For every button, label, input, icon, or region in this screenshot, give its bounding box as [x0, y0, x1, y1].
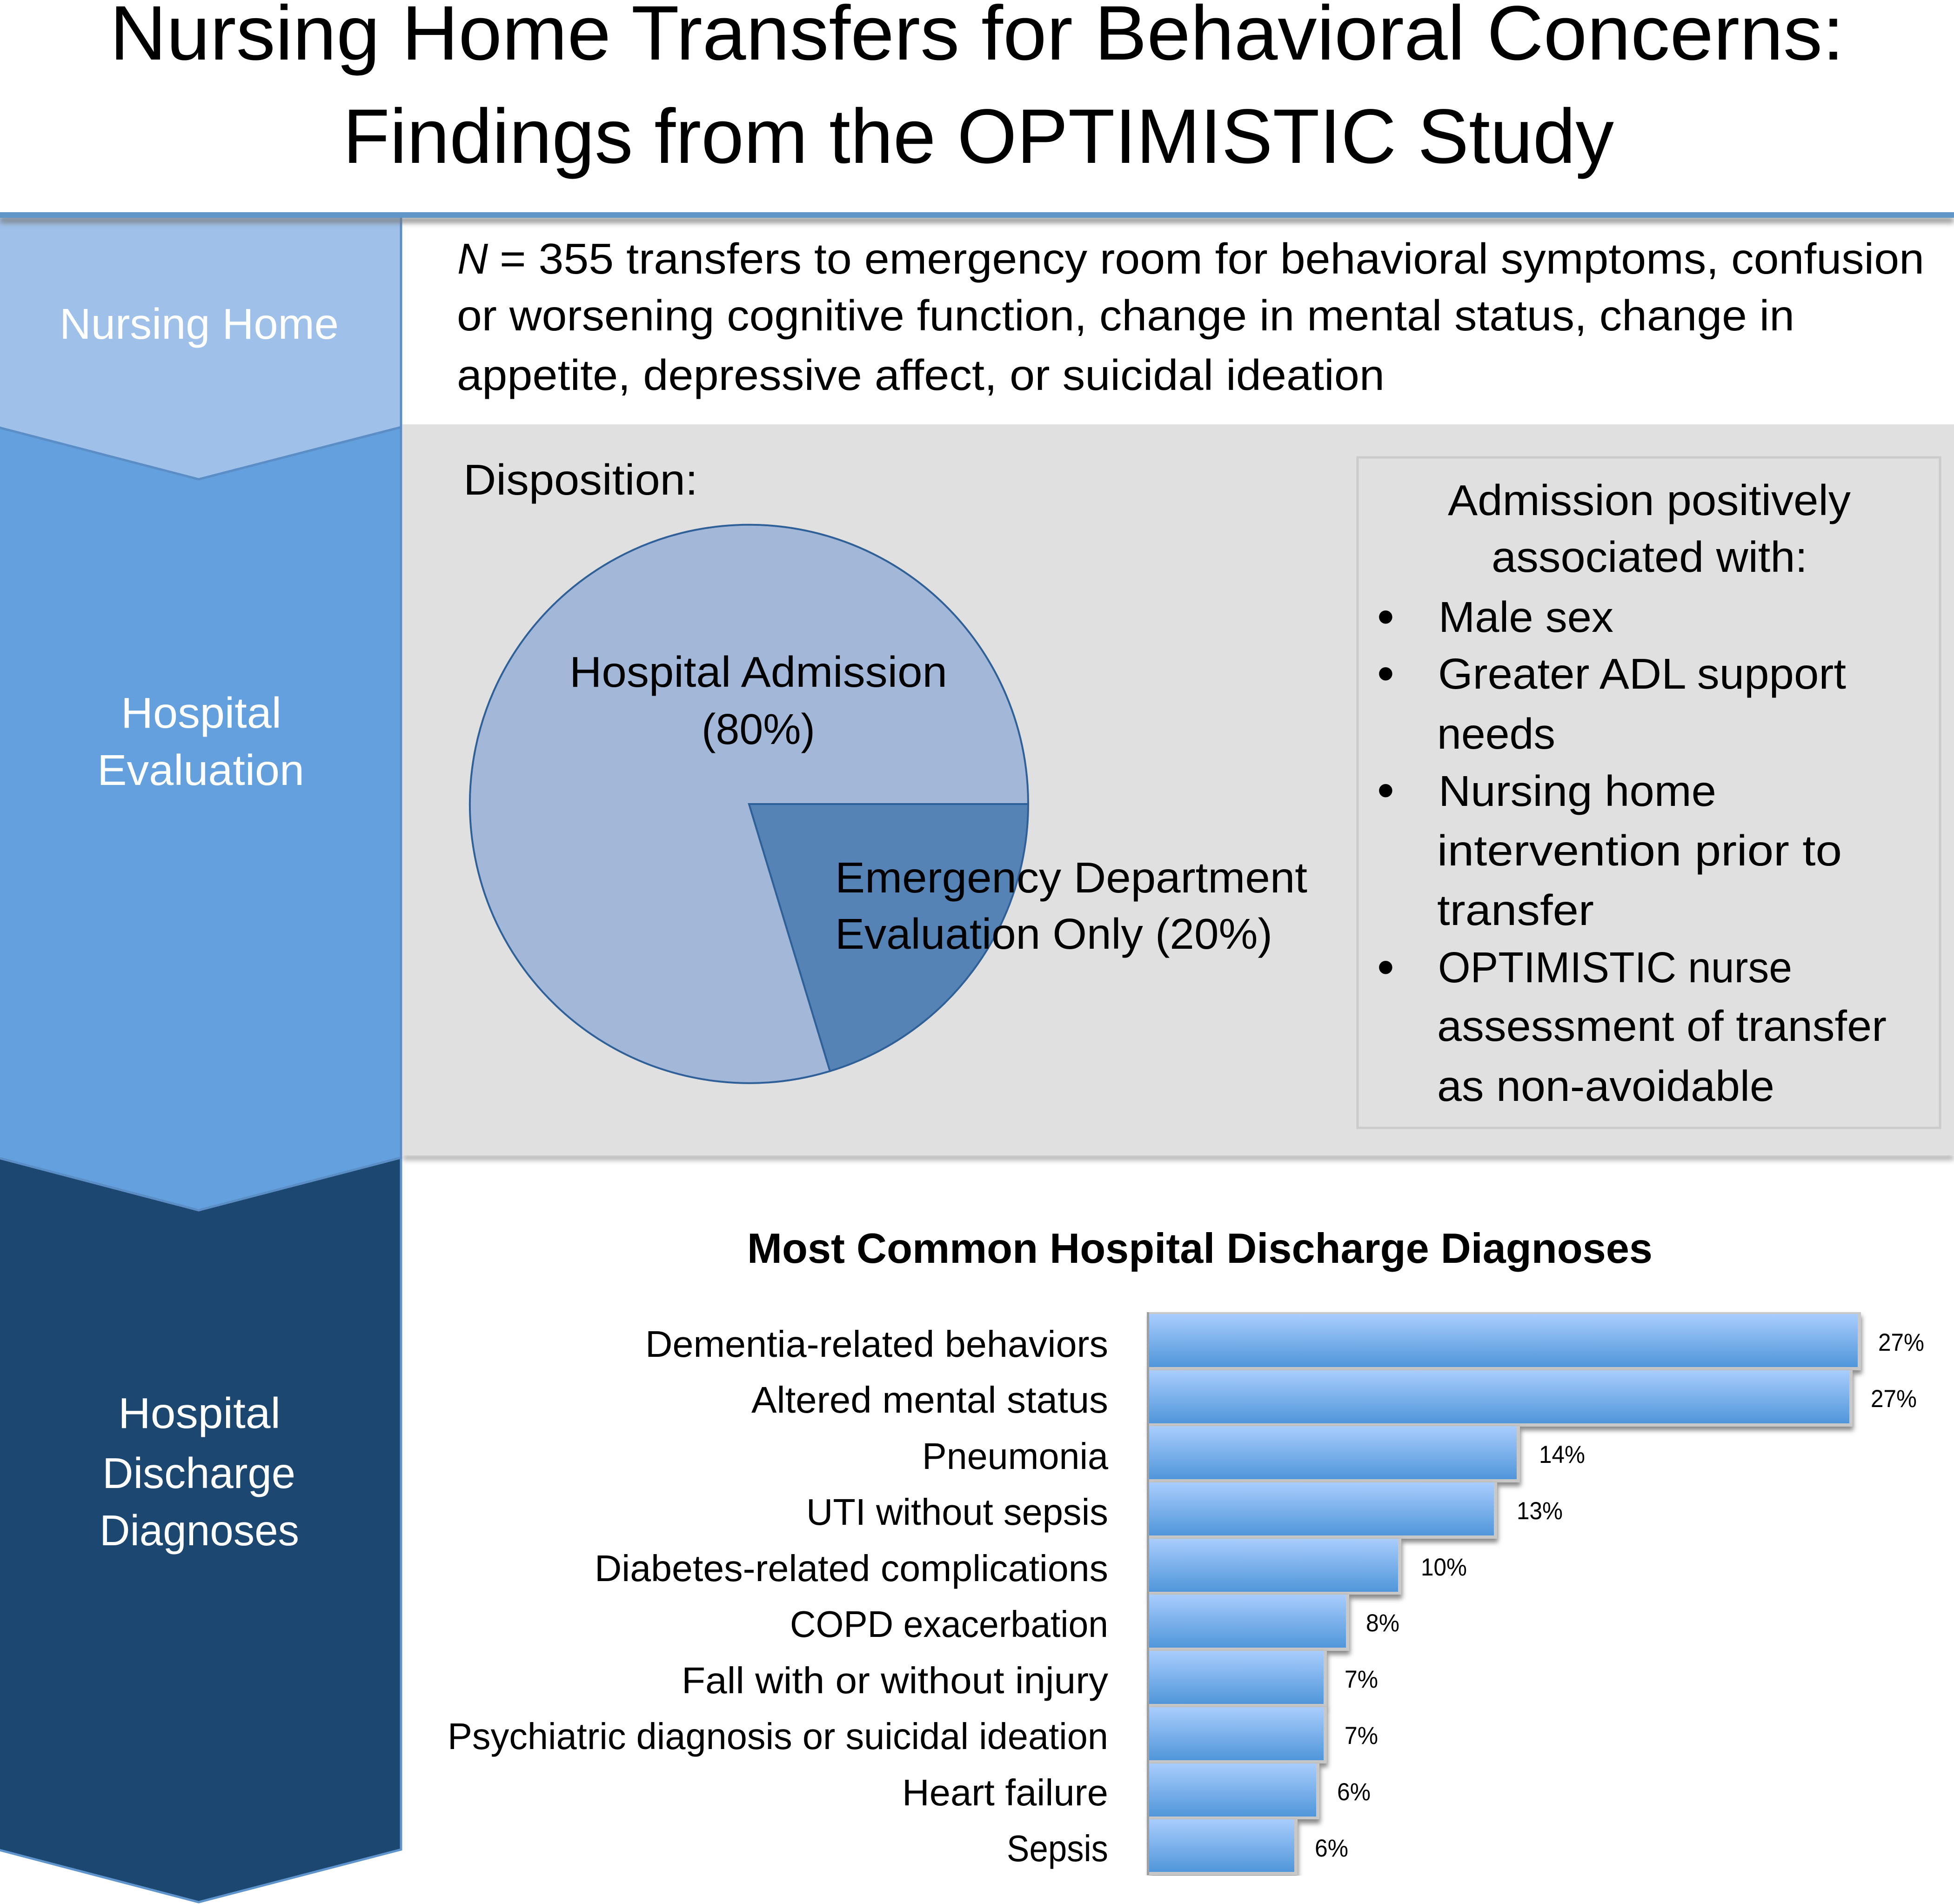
sidebar: nursing home chevron [0, 214, 401, 479]
panel: study population text: N [457, 235, 488, 283]
category labels: UTI without sepsis [806, 1491, 1108, 1533]
pie slice: hospital admission 80% [470, 525, 1028, 1083]
bar: sepsis 6% [1147, 1819, 1298, 1879]
bar: psychiatric diagnosis 7% [1147, 1707, 1328, 1767]
category labels: Pneumonia [922, 1435, 1108, 1477]
bar chart: discharge diagnoses [448, 1312, 1924, 1879]
pie label: emergency department: Evaluation Only (20%) [835, 910, 1272, 958]
heading: disposition: Disposition: [463, 456, 698, 504]
bullet: nursing home intervention: • [1377, 763, 1394, 818]
bar: fall with or without injury 7% [1147, 1651, 1328, 1711]
bullet: nursing home intervention: intervention prior to [1437, 826, 1842, 875]
bar: pneumonia 14% [1147, 1426, 1521, 1486]
panel: disposition background [402, 424, 1954, 1159]
callout heading [1448, 476, 1851, 581]
pie label: hospital admission: Hospital Admission [569, 648, 947, 696]
bullet: nursing home intervention: transfer [1437, 886, 1594, 934]
sidebar: nursing home chevron: Nursing Home [60, 300, 339, 348]
callout heading: associated with: [1492, 533, 1807, 581]
sidebar: hospital evaluation chevron [0, 419, 401, 1210]
value labels: 6% [1337, 1778, 1371, 1806]
category labels: Sepsis [1007, 1828, 1108, 1869]
panel: study population text: appetite, depressive affect, or suicidal ideation [457, 351, 1385, 399]
title [110, 0, 1844, 180]
category labels: Heart failure [902, 1772, 1108, 1813]
sidebar: hospital evaluation chevron: Hospital [121, 689, 281, 737]
bullet: ADL support: needs [1437, 710, 1555, 758]
pie label: hospital admission: (80%) [702, 705, 815, 753]
panel: study population text: or worsening cognitive function, change in mental status, change in [457, 291, 1794, 340]
bullet: nurse assessment [1377, 940, 1887, 1110]
category labels: COPD exacerbation [790, 1603, 1108, 1645]
category labels: Diabetes-related complications [595, 1548, 1108, 1589]
pie label: hospital admission [569, 648, 947, 753]
bullet: male sex [1377, 590, 1613, 644]
bullet: nurse assessment: as non-avoidable [1437, 1062, 1774, 1110]
pie slice: emergency department 20% [749, 804, 1028, 1071]
value labels: 27% [1878, 1329, 1924, 1356]
bar: diabetes-related complications 10% [1147, 1539, 1402, 1599]
title: Findings from the OPTIMISTIC Study [343, 94, 1614, 180]
value labels: 7% [1345, 1722, 1378, 1750]
bullet: ADL support [1377, 646, 1846, 758]
value labels: 7% [1345, 1666, 1378, 1693]
bar: heart failure 6% [1147, 1763, 1320, 1824]
header rule [0, 212, 1954, 222]
sidebar: hospital discharge diagnoses chevron: Discharge [102, 1449, 295, 1497]
value labels: 10% [1421, 1554, 1467, 1581]
category labels: Dementia-related behaviors [645, 1323, 1108, 1365]
value labels: 8% [1366, 1609, 1399, 1637]
chart title: Most Common Hospital Discharge Diagnoses [747, 1225, 1653, 1272]
pie label: emergency department [835, 853, 1307, 958]
pie label: emergency department: Emergency Department [835, 853, 1307, 902]
callout heading: Admission positively [1448, 476, 1851, 524]
bullet: nursing home intervention: Nursing home [1439, 767, 1716, 815]
pie chart: disposition [470, 525, 1307, 1083]
bullet: nurse assessment: OPTIMISTIC nurse [1438, 943, 1792, 992]
bar: UTI without sepsis 13% [1147, 1482, 1498, 1542]
sidebar: hospital evaluation chevron: Evaluation [97, 746, 304, 794]
value labels: 6% [1315, 1835, 1348, 1862]
value labels [1315, 1329, 1924, 1862]
sidebar: hospital discharge diagnoses chevron: Hospital [118, 1389, 281, 1437]
sidebar: hospital discharge diagnoses chevron [0, 1117, 401, 1902]
value labels: 27% [1871, 1385, 1917, 1413]
category labels: Psychiatric diagnosis or suicidal ideation [448, 1716, 1108, 1757]
category labels: Altered mental status [751, 1379, 1108, 1421]
category labels: Fall with or without injury [682, 1660, 1108, 1701]
bullet: nursing home intervention [1377, 763, 1842, 934]
category labels [448, 1323, 1108, 1869]
value labels: 14% [1539, 1441, 1585, 1468]
bullet: nurse assessment: assessment of transfer [1437, 1002, 1887, 1050]
bar: COPD exacerbation 8% [1147, 1595, 1350, 1655]
sidebar: hospital discharge diagnoses chevron: Diagnoses [100, 1506, 299, 1555]
value labels: 13% [1517, 1497, 1563, 1525]
bullet: ADL support: • [1377, 646, 1394, 701]
bar: dementia-related behaviors 27% [1147, 1312, 1862, 1374]
bullet: nurse assessment: • [1377, 940, 1394, 994]
bullet: male sex: • [1377, 590, 1394, 644]
bullet: ADL support: Greater ADL support [1438, 650, 1846, 698]
panel: study population text: = 355 transfers to emergency room for behavioral symptoms, confusion [500, 235, 1924, 283]
panel: study population text [457, 235, 1924, 399]
callout: admission associations [1358, 457, 1940, 1128]
bullet: male sex: Male sex [1439, 593, 1613, 641]
bar: altered mental status 27% [1147, 1370, 1854, 1430]
